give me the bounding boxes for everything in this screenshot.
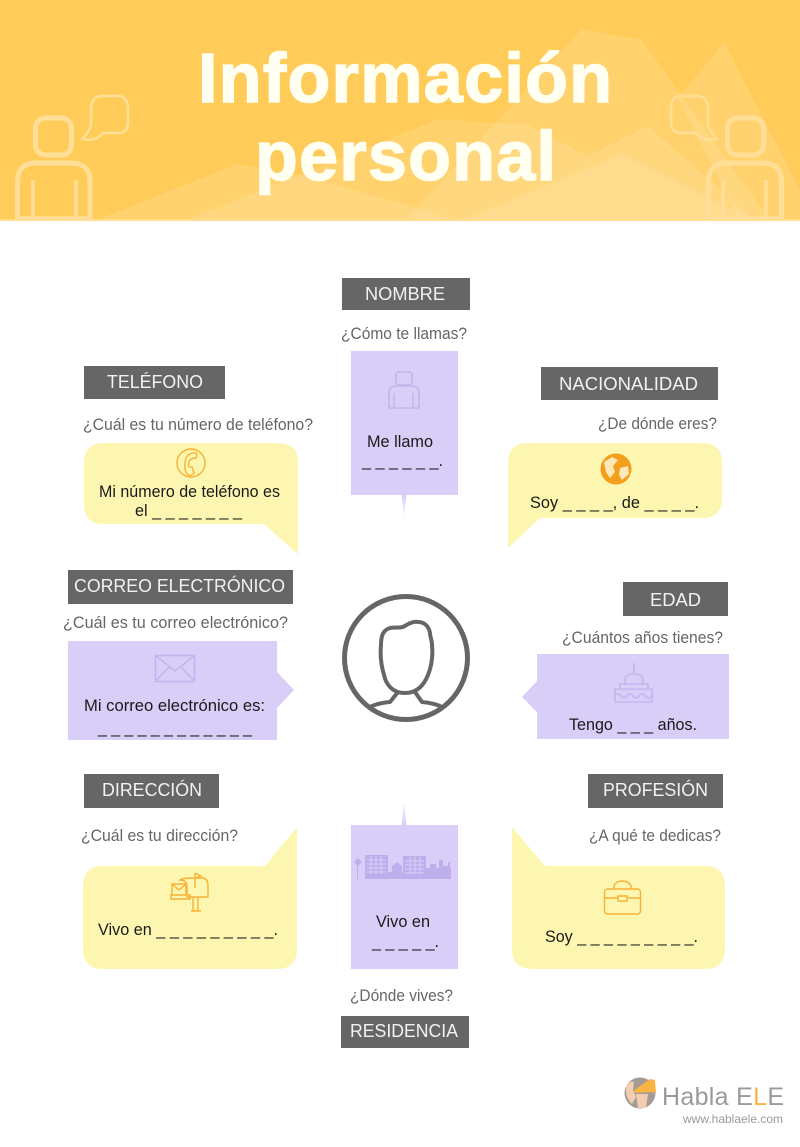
label: dirección <box>84 774 219 808</box>
wordmark: Habla ELE <box>662 1083 784 1111</box>
label: correo electrónico <box>68 570 293 604</box>
answer: teléfono: el _ _ _ _ _ _ _ <box>135 501 243 520</box>
label: nacionalidad <box>541 367 718 400</box>
question: nacionalidad: ¿De dónde eres? <box>598 414 717 433</box>
bubble: nombre <box>351 351 458 517</box>
question: teléfono: ¿Cuál es tu número de teléfono? <box>83 415 313 434</box>
title: Información <box>198 39 612 117</box>
question: edad: ¿Cuántos años tienes? <box>562 628 723 647</box>
central profile icon <box>344 596 468 720</box>
label: edad <box>623 582 728 616</box>
answer: dirección: Vivo en _ _ _ _ _ _ _ _ _. <box>98 920 278 939</box>
panel: edad <box>522 582 729 739</box>
label: profesión <box>588 774 723 808</box>
panel: residencia <box>341 802 469 1048</box>
bubble: teléfono <box>84 443 298 554</box>
label: dirección: DIRECCIÓN <box>102 779 202 800</box>
question: nombre: ¿Cómo te llamas? <box>341 324 467 343</box>
title <box>198 39 612 195</box>
icon: globe <box>600 454 632 484</box>
label: teléfono <box>84 366 225 399</box>
header banner <box>0 0 800 221</box>
label: profesión: PROFESIÓN <box>603 779 708 800</box>
panel: profesión <box>512 774 725 969</box>
website: www.hablaele.com <box>682 1112 783 1126</box>
logo: Habla ELE <box>624 1078 784 1126</box>
title: personal <box>255 117 556 195</box>
panel: correo electrónico <box>63 570 294 740</box>
label: edad: EDAD <box>650 590 701 610</box>
panel: dirección <box>81 774 297 969</box>
icon: cake <box>615 663 652 702</box>
question: dirección: ¿Cuál es tu dirección? <box>81 826 238 845</box>
answer: profesión: Soy _ _ _ _ _ _ _ _ _. <box>545 927 698 946</box>
icon: mailbox <box>171 873 208 911</box>
icon: envelope <box>156 656 194 682</box>
panel: nombre <box>341 278 470 517</box>
label: nombre: NOMBRE <box>365 284 445 304</box>
bubble: correo electrónico <box>68 641 294 740</box>
bubble: dirección <box>83 827 297 969</box>
answer: residencia: _ _ _ _ _. <box>371 932 439 951</box>
answer: nacionalidad: Soy _ _ _ _, de _ _ _ _. <box>530 493 699 512</box>
answer: nombre: _ _ _ _ _ _. <box>361 451 443 470</box>
answer: correo electrónico: _ _ _ _ _ _ _ _ _ _ _ _ <box>97 718 252 737</box>
icon: person <box>389 372 419 408</box>
question: residencia: ¿Dónde vives? <box>350 986 453 1005</box>
icon: city skyline <box>354 855 451 879</box>
question: correo electrónico: ¿Cuál es tu correo electrónico? <box>63 613 288 632</box>
icon: megaphone globe <box>624 1078 656 1108</box>
label: residencia: RESIDENCIA <box>350 1021 458 1041</box>
icon: left person with speech bubble <box>17 96 128 221</box>
label: correo electrónico: CORREO ELECTRÓNICO <box>74 575 285 596</box>
question: profesión: ¿A qué te dedicas? <box>589 826 721 845</box>
panel: nacionalidad <box>508 367 722 548</box>
bubble: residencia <box>351 802 458 969</box>
answer: teléfono: Mi número de teléfono es <box>99 482 280 501</box>
label: teléfono: TELÉFONO <box>107 372 203 392</box>
icon: right person with speech bubble <box>671 96 783 221</box>
answer: nombre <box>361 432 443 470</box>
answer: correo electrónico <box>84 696 265 737</box>
answer: teléfono <box>99 482 280 520</box>
bubble: profesión <box>512 827 725 969</box>
answer: residencia: Vivo en <box>376 912 430 931</box>
label: residencia <box>341 1016 469 1048</box>
icon: briefcase <box>604 881 640 914</box>
answer: edad: Tengo _ _ _ años. <box>569 715 697 734</box>
panel: teléfono <box>83 366 313 554</box>
answer: residencia <box>371 912 439 951</box>
label: nacionalidad: NACIONALIDAD <box>559 374 698 394</box>
answer: correo electrónico: Mi correo electrónico es: <box>84 696 265 715</box>
answer: nombre: Me llamo <box>367 432 433 451</box>
bubble: edad <box>522 654 729 739</box>
icon: phone <box>177 449 205 477</box>
label: nombre <box>342 278 470 310</box>
bubble: nacionalidad <box>508 443 722 548</box>
